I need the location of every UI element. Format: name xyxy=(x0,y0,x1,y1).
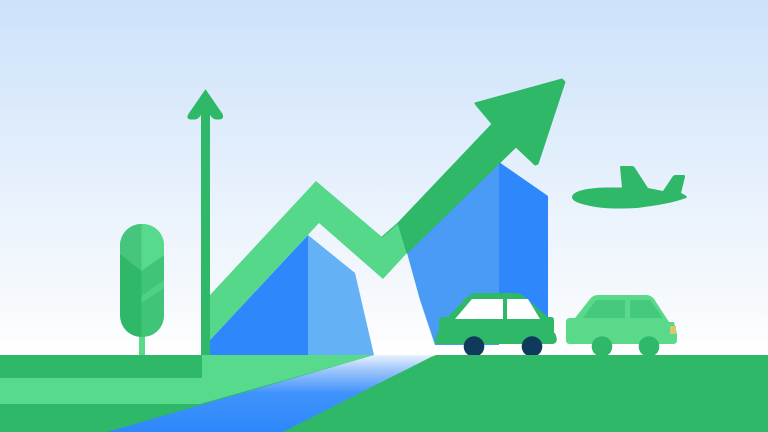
arrow: vertical green xyxy=(188,90,223,356)
ground: left striped fields xyxy=(0,355,400,432)
building: left blue xyxy=(210,235,374,355)
building: right blue xyxy=(407,162,548,345)
ground: right field xyxy=(283,355,768,432)
river xyxy=(107,355,435,432)
icon: light green car xyxy=(566,295,677,357)
trend line: light green zigzag xyxy=(210,181,407,340)
icon: dark green car xyxy=(435,293,557,357)
icon: airplane xyxy=(572,166,687,209)
icon: tree xyxy=(120,224,164,355)
arrow: dark green rising trend head xyxy=(382,79,565,253)
